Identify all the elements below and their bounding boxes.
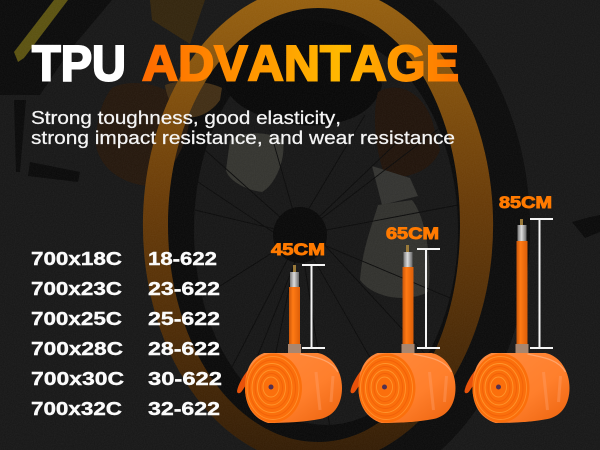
wheel interior	[194, 35, 458, 425]
row 700x23C: 23-622	[148, 278, 220, 299]
label 45CM: 45CM	[271, 241, 325, 259]
row 700x28C: 700x28C	[31, 338, 123, 359]
subtitle: Strong toughness, good elasticity,	[31, 107, 341, 128]
row 700x18C: 700x18C	[31, 248, 122, 269]
crank arm	[14, 0, 68, 62]
row 700x25C	[31, 308, 220, 329]
subtitle: strong impact resistance, and wear resistance	[31, 127, 455, 148]
row 700x32C: 32-622	[148, 398, 220, 419]
pedal	[14, 100, 80, 182]
tube roll	[350, 353, 456, 423]
valve and stem	[516, 219, 528, 353]
row 700x23C: 700x23C	[31, 278, 122, 299]
bike frame shadow left	[0, 0, 112, 95]
tube: 45CM	[237, 241, 342, 423]
left shoe	[226, 133, 283, 192]
height ruler	[302, 265, 325, 348]
valve and stem	[402, 245, 414, 353]
wheel hub	[273, 207, 327, 263]
row 700x32C	[31, 398, 220, 419]
tube roll	[464, 353, 570, 423]
left knee	[96, 83, 190, 186]
height ruler	[530, 219, 553, 348]
row 700x30C	[31, 368, 222, 389]
tube: 85CM	[464, 194, 570, 423]
valve and stem	[288, 265, 301, 353]
wheel inner band	[166, 8, 470, 442]
wheel rim	[143, 0, 493, 450]
row 700x25C: 25-622	[148, 308, 220, 329]
spokes	[195, 115, 458, 428]
label 65CM: 65CM	[386, 225, 439, 243]
row 700x18C	[31, 248, 217, 269]
title word: TPU: TPU	[32, 36, 126, 92]
right thigh	[375, 88, 440, 177]
row 700x23C	[31, 278, 220, 299]
hand	[165, 81, 222, 117]
label 85CM: 85CM	[499, 194, 552, 212]
right shoe	[360, 200, 429, 298]
sock	[372, 166, 418, 205]
tube roll	[237, 353, 342, 423]
row 700x30C: 30-622	[148, 368, 222, 389]
subtitle	[31, 107, 455, 148]
title word: ADVANTAGE: ADVANTAGE	[142, 36, 459, 92]
row 700x28C: 28-622	[148, 338, 220, 359]
row 700x18C: 18-622	[148, 248, 217, 269]
height ruler	[417, 249, 440, 348]
cyclist shorts	[225, 20, 382, 125]
title	[32, 36, 459, 92]
row 700x32C: 700x32C	[31, 398, 122, 419]
size table	[31, 248, 222, 419]
tube: 65CM	[350, 225, 456, 423]
dark object at right edge	[572, 215, 600, 238]
row 700x28C	[31, 338, 220, 359]
row 700x30C: 700x30C	[31, 368, 124, 389]
left thigh	[150, 0, 205, 44]
row 700x25C: 700x25C	[31, 308, 122, 329]
outer black tire	[318, 0, 530, 450]
